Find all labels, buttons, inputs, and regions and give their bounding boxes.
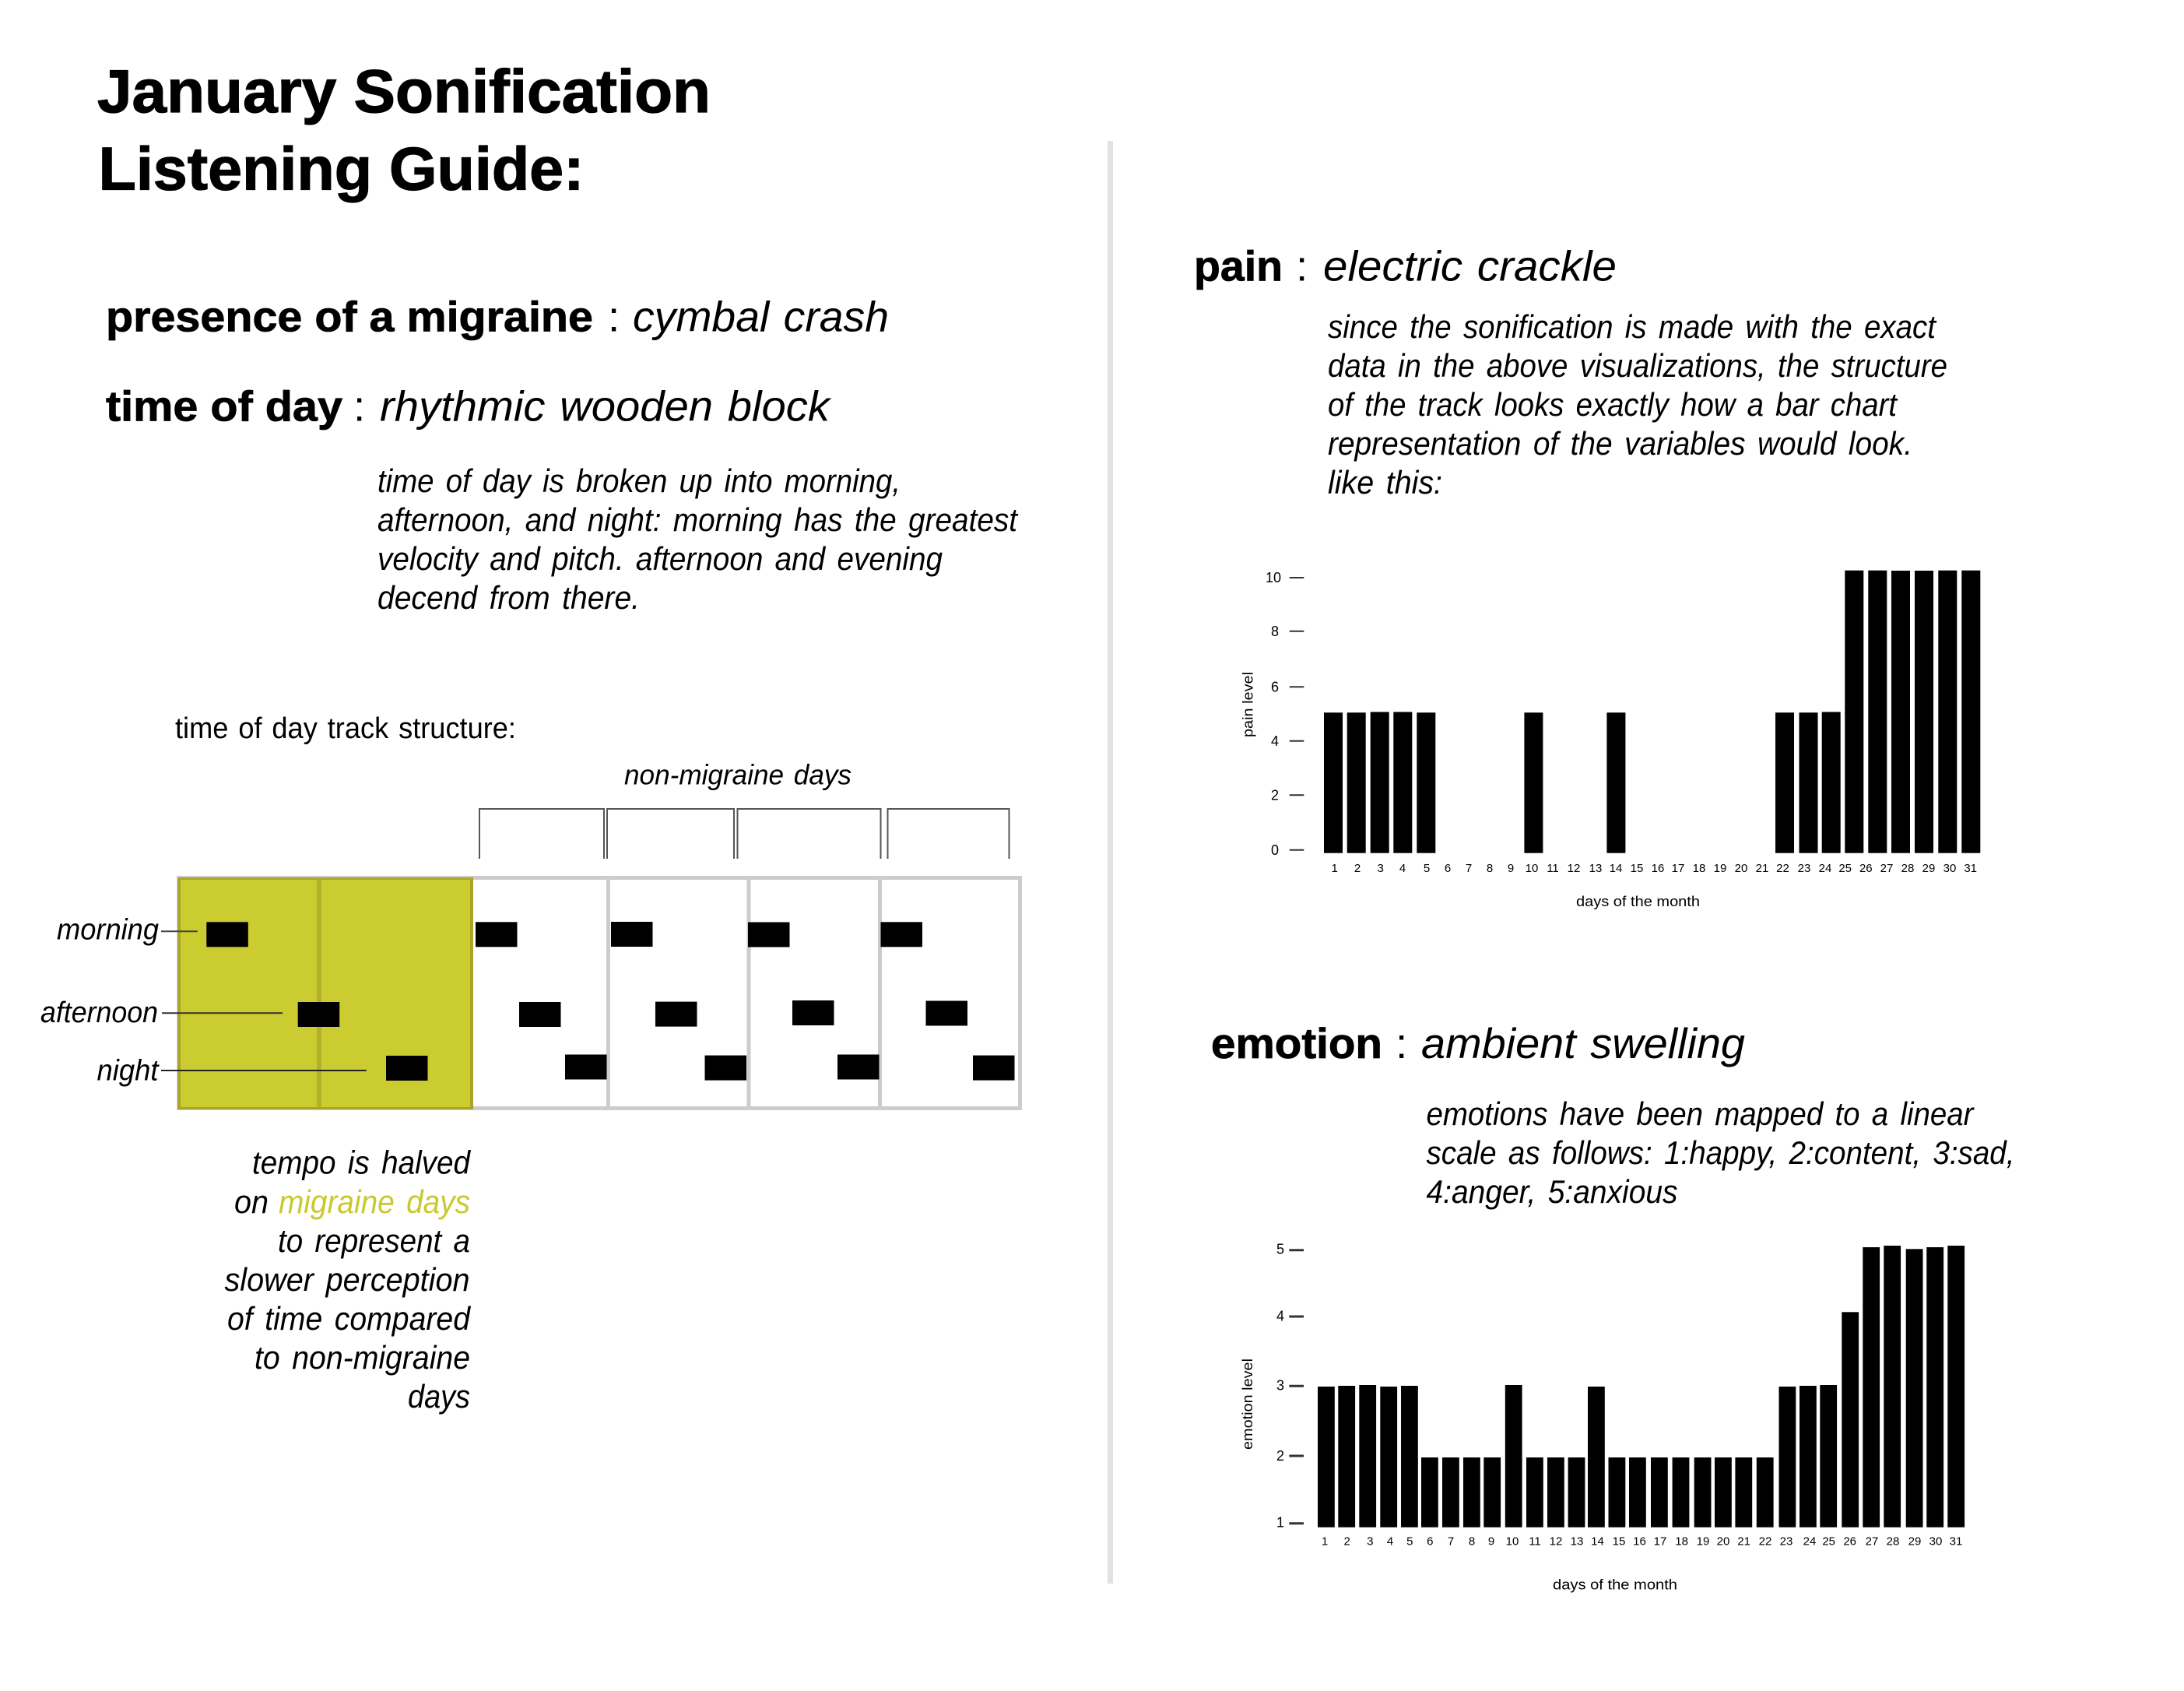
text block: time of day description: velocity and pitch. afternoon and evening	[377, 540, 943, 577]
heading: presence of a migraine: cymbal crash	[633, 293, 889, 341]
text block: time of day description: afternoon, and night: morning has the greatest	[377, 501, 1019, 538]
heading: emotion: emotion	[1211, 1019, 1382, 1067]
text block: emotion description: emotions have been mapped to a linear	[1426, 1095, 1975, 1132]
y axis values: 2	[1276, 1448, 1284, 1464]
text block: time of day description: time of day is broken up into morning,	[377, 462, 901, 499]
text block: tempo note: days	[408, 1378, 470, 1415]
x axis values: 18	[1693, 862, 1705, 875]
x axis values: 2	[1344, 1535, 1350, 1548]
text block: tempo note	[224, 1144, 472, 1415]
x axis values	[1322, 1535, 1962, 1548]
row labels: night	[97, 1054, 160, 1087]
label: non-migraine days: non-migraine days	[624, 758, 851, 791]
x axis values: 5	[1406, 1535, 1413, 1548]
text block: emotion description: 4:anger, 5:anxious	[1426, 1173, 1678, 1210]
text block: tempo note: slower perception	[224, 1261, 470, 1298]
text block: time of day description	[377, 462, 1019, 616]
x axis values: 11	[1547, 862, 1559, 875]
heading: time of day: time of day	[106, 381, 342, 430]
x axis values: 31	[1950, 1535, 1962, 1548]
x axis values: 9	[1488, 1535, 1494, 1548]
title	[97, 57, 711, 202]
x axis values: 30	[1943, 862, 1956, 875]
x axis values: 21	[1737, 1535, 1750, 1548]
y axis values: 0	[1271, 842, 1279, 858]
x axis values: 9	[1508, 862, 1514, 875]
heading: emotion: ambient swelling	[1421, 1019, 1745, 1067]
x axis values: 14	[1610, 862, 1622, 875]
x axis values: 3	[1378, 862, 1384, 875]
x axis values: 7	[1466, 862, 1472, 875]
bar chart: pain level	[1240, 570, 1980, 909]
x axis values: 1	[1332, 862, 1338, 875]
x axis values: 12	[1568, 862, 1580, 875]
y axis values: 3	[1276, 1378, 1284, 1394]
text block: pain description: data in the above visualizations, the structure	[1328, 347, 1947, 384]
panel: non-migraine day dividers	[606, 877, 882, 1109]
y axis values: 1	[1276, 1515, 1284, 1531]
x axis values: 27	[1880, 862, 1893, 875]
track structure diagram	[40, 877, 1020, 1109]
brackets: non-migraine days	[479, 809, 1009, 859]
x axis values: 23	[1780, 1535, 1792, 1548]
heading: pain	[1194, 241, 1617, 290]
x axis values: 25	[1838, 862, 1852, 875]
y axis values: 8	[1271, 624, 1279, 639]
x axis values: 29	[1908, 1535, 1921, 1548]
panel: migraine days	[177, 877, 473, 1109]
x axis values: 19	[1714, 862, 1726, 875]
text block: tempo note: tempo is halved	[252, 1144, 472, 1180]
bar chart: emotion level	[1240, 1241, 1965, 1593]
x axis values: 8	[1487, 862, 1493, 875]
x axis values: 4	[1387, 1535, 1393, 1548]
x axis values: 23	[1798, 862, 1810, 875]
heading: pain: pain	[1194, 241, 1283, 290]
x axis values: 27	[1866, 1535, 1878, 1548]
text block: pain description: representation of the variables would look.	[1328, 425, 1912, 462]
x axis values: 19	[1697, 1535, 1709, 1548]
x axis label: days of the month	[1576, 894, 1700, 909]
y axis values: 6	[1271, 679, 1279, 694]
y axis label: pain level	[1240, 672, 1255, 737]
y axis values	[1276, 1241, 1284, 1531]
x axis values: 25	[1822, 1535, 1835, 1548]
x axis values: 4	[1399, 862, 1406, 875]
x axis values: 17	[1672, 862, 1684, 875]
text block: tempo note: of time compared	[227, 1300, 472, 1337]
x axis values: 21	[1756, 862, 1768, 875]
x axis values: 20	[1717, 1535, 1729, 1548]
bars	[1318, 1246, 1965, 1528]
x axis values: 26	[1843, 1535, 1856, 1548]
row labels	[40, 914, 160, 1087]
heading: presence of a migraine: presence of a migraine	[106, 293, 593, 341]
heading: time of day: :	[353, 381, 365, 430]
x axis values: 14	[1591, 1535, 1604, 1548]
x axis values: 28	[1901, 862, 1914, 875]
x axis values	[1332, 862, 1977, 875]
x axis values: 15	[1613, 1535, 1625, 1548]
panel: track frame	[179, 878, 1020, 1109]
text block: tempo note: on	[234, 1183, 269, 1220]
y axis values: 4	[1271, 733, 1279, 749]
x axis values: 3	[1367, 1535, 1373, 1548]
x axis values: 13	[1589, 862, 1602, 875]
heading: time of day: rhythmic wooden block	[380, 381, 832, 430]
text block: pain description: like this:	[1328, 464, 1442, 501]
x axis label: days of the month	[1553, 1577, 1677, 1593]
y axis values: 4	[1276, 1308, 1284, 1324]
y axis ticks	[1289, 1250, 1304, 1524]
x axis values: 11	[1529, 1535, 1541, 1548]
row labels: afternoon	[40, 997, 158, 1029]
x axis values: 24	[1803, 1535, 1816, 1548]
heading: time of day track structure: time of day track structure:	[175, 712, 516, 745]
y axis values: 10	[1266, 570, 1281, 585]
x axis values: 28	[1887, 1535, 1899, 1548]
x axis values: 7	[1448, 1535, 1454, 1548]
x axis values: 22	[1776, 862, 1789, 875]
x axis values: 31	[1964, 862, 1977, 875]
x axis values: 17	[1654, 1535, 1666, 1548]
heading: emotion	[1211, 1019, 1745, 1067]
heading: pain: electric crackle	[1323, 241, 1617, 290]
x axis values: 13	[1571, 1535, 1583, 1548]
text block: pain description: of the track looks exactly how a bar chart	[1328, 386, 1898, 423]
text block: tempo note: to non-migraine	[255, 1339, 470, 1376]
x axis values: 10	[1506, 1535, 1519, 1548]
row labels: morning	[57, 914, 159, 947]
blocks: afternoon	[298, 1000, 967, 1027]
heading: presence of a migraine	[106, 293, 889, 341]
x axis values: 1	[1322, 1535, 1328, 1548]
text block: emotion description	[1426, 1095, 2014, 1210]
y axis ticks	[1290, 578, 1304, 850]
text block: time of day description: decend from there.	[377, 579, 640, 616]
y axis label: emotion level	[1240, 1359, 1255, 1450]
leader lines	[161, 931, 367, 1070]
heading: presence of a migraine: :	[608, 293, 620, 341]
x axis values: 12	[1550, 1535, 1562, 1548]
divider between columns	[1108, 141, 1113, 1584]
y axis values: 2	[1271, 788, 1279, 803]
x axis values: 10	[1526, 862, 1538, 875]
x axis values: 15	[1631, 862, 1643, 875]
x axis values: 18	[1675, 1535, 1688, 1548]
y axis values: 5	[1276, 1241, 1284, 1257]
text block: pain description	[1328, 308, 1947, 501]
text block: tempo note: migraine days	[279, 1183, 470, 1220]
blocks: morning	[206, 922, 922, 947]
x axis values: 16	[1652, 862, 1664, 875]
text block: tempo note: to represent a	[278, 1222, 470, 1259]
x axis values: 6	[1427, 1535, 1433, 1548]
x axis values: 22	[1759, 1535, 1771, 1548]
text block: emotion description: scale as follows: 1:happy, 2:content, 3:sad,	[1426, 1134, 2014, 1171]
x axis values: 26	[1859, 862, 1873, 875]
x axis values: 29	[1922, 862, 1935, 875]
title: Listening Guide:	[98, 134, 584, 202]
blocks: night	[386, 1054, 1015, 1081]
x axis values: 24	[1819, 862, 1831, 875]
text block: pain description: since the sonification is made with the exact	[1328, 308, 1937, 345]
y axis values	[1266, 570, 1281, 858]
x axis values: 20	[1735, 862, 1747, 875]
x axis values: 30	[1929, 1535, 1942, 1548]
title: January Sonification	[97, 57, 711, 125]
x axis values: 16	[1633, 1535, 1646, 1548]
heading: time of day	[106, 381, 832, 430]
x axis values: 6	[1445, 862, 1451, 875]
heading: pain: :	[1296, 241, 1308, 290]
x axis values: 5	[1424, 862, 1430, 875]
bars	[1324, 571, 1980, 853]
heading: emotion: :	[1396, 1019, 1407, 1067]
x axis values: 8	[1469, 1535, 1475, 1548]
x axis values: 2	[1354, 862, 1361, 875]
